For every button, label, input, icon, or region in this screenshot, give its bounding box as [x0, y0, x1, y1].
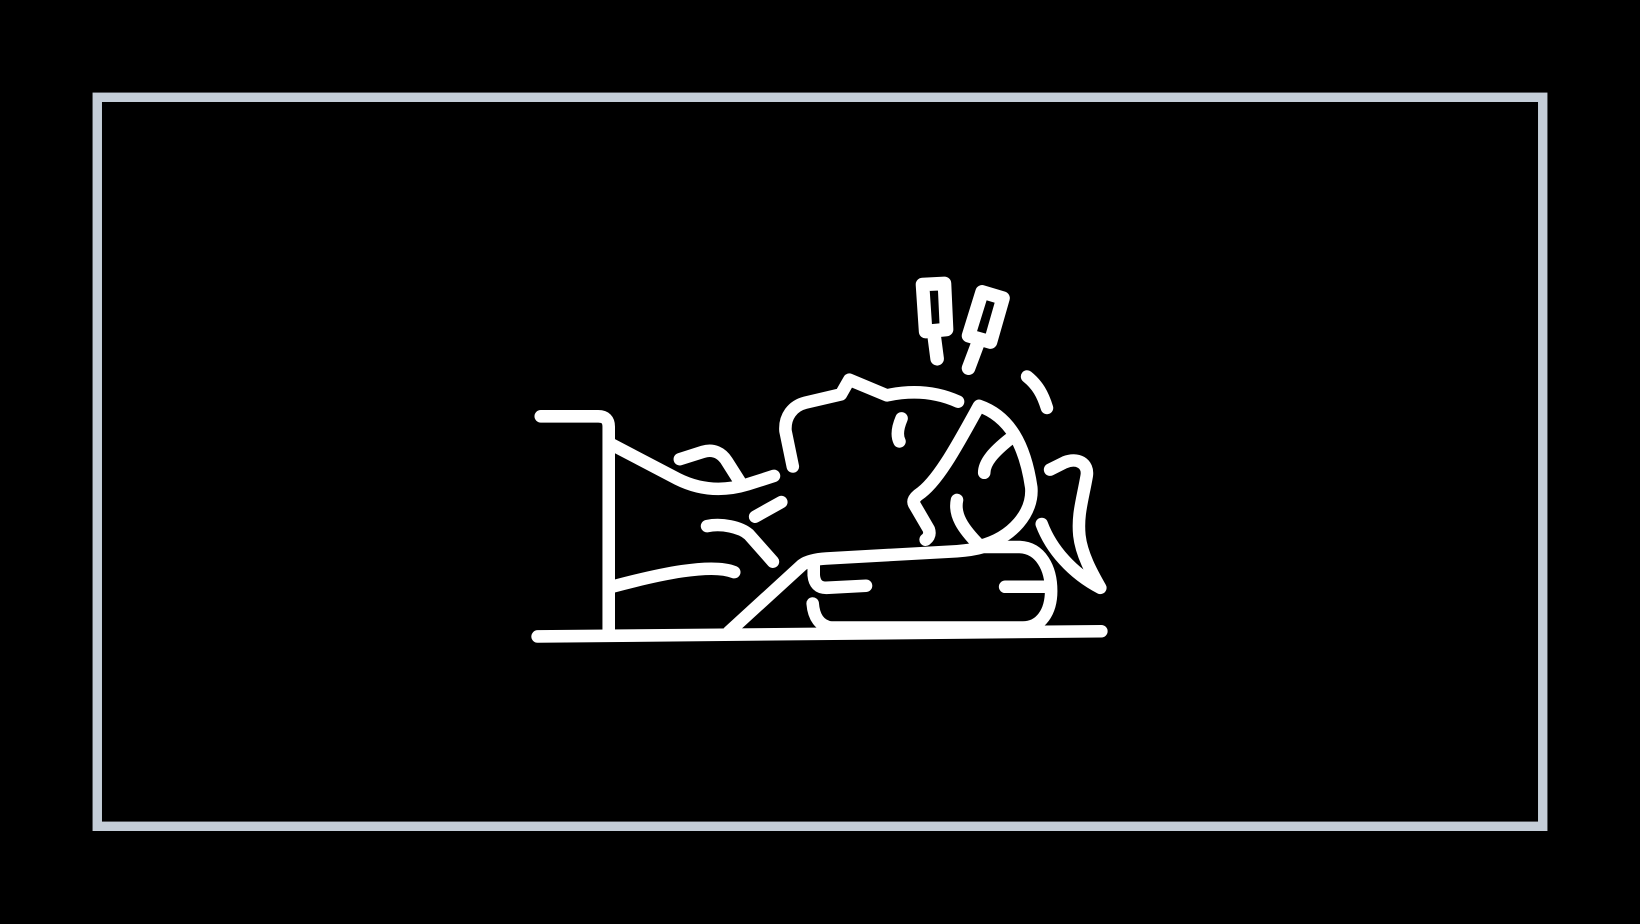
hand — [680, 451, 739, 481]
pillow inner fold — [814, 565, 866, 588]
hair outline — [914, 406, 1031, 546]
pillow — [729, 547, 1051, 632]
frame — [97, 97, 1543, 826]
face profile — [785, 380, 958, 466]
upper arm — [612, 445, 774, 489]
hair accent — [1027, 377, 1047, 408]
needle 1 — [922, 283, 947, 359]
pillow inner right — [1005, 581, 1048, 593]
ponytail — [1042, 460, 1100, 588]
lower arm — [612, 569, 734, 587]
needle 2 — [969, 292, 1003, 368]
eye — [898, 418, 902, 441]
hair inner — [984, 439, 1009, 473]
bed headboard post — [541, 416, 609, 632]
icon: person lying on treatment bed with acupuncture needles — [538, 283, 1101, 636]
neck mark — [755, 502, 781, 517]
bed ground line — [538, 631, 1101, 636]
shoulder — [707, 525, 773, 562]
